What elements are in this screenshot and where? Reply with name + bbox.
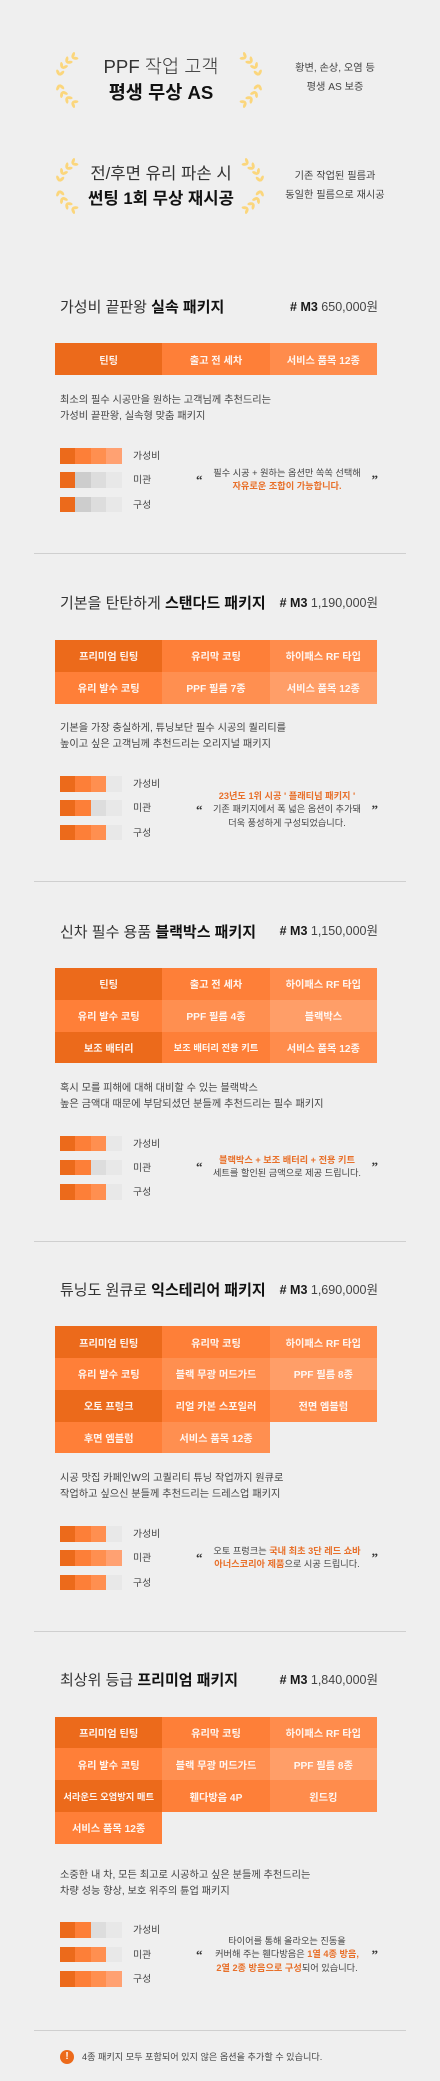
description: 가성비 끝판왕, 실속형 맞춤 패키지 [60, 411, 205, 422]
heading: 튜닝도 원큐로 익스테리어 패키지 [60, 1282, 266, 1299]
callout [196, 1545, 378, 1572]
callout: 2열 2종 방음으로 구성되어 있습니다. [216, 1963, 358, 1973]
panel: glass damage re-tinting [56, 158, 385, 214]
panel: value package [55, 299, 378, 512]
rating: looks: 미관 [133, 803, 151, 814]
rating: looks: 미관 [133, 1553, 151, 1564]
icon: exclamation: ! [65, 2051, 69, 2062]
service grid: 하이패스 RF 타입 [286, 652, 361, 663]
service grid [55, 968, 377, 1063]
rating: value [60, 448, 160, 464]
callout [196, 791, 378, 828]
heading: 가성비 끝판왕 실속 패키지 [60, 299, 224, 316]
service grid: 리얼 카본 스포일러 [176, 1402, 256, 1413]
callout: “ [196, 1947, 202, 1962]
service grid: 블랙박스 [305, 1012, 342, 1023]
callout: 더욱 풍성하게 구성되었습니다. [228, 818, 346, 828]
description: 높은 금액대 때문에 부담되셨던 분들께 추천드리는 필수 패키지 [60, 1099, 324, 1110]
callout: 타이어를 통해 올라오는 진동을 [228, 1936, 346, 1946]
service grid: 틴팅 [99, 980, 118, 991]
rating: value [60, 1922, 165, 1938]
service grid: 휀다방음 4P [190, 1793, 242, 1804]
service grid: 하이패스 RF 타입 [286, 980, 361, 991]
rating: composition: 구성 [133, 828, 151, 838]
rating: looks [60, 1160, 151, 1175]
rating: looks [60, 800, 151, 816]
service grid: 유리막 코팅 [191, 1729, 241, 1740]
heading: 최상위 등급 프리미엄 패키지 [60, 1672, 238, 1689]
service grid: 서비스 품목 12종 [72, 1824, 145, 1835]
description: 시공 맛집 카페인W의 고퀄리티 튜닝 작업까지 원큐로 [60, 1473, 283, 1484]
description [60, 1868, 310, 1899]
service grid: 유리 발수 코팅 [78, 1761, 140, 1772]
service grid: 프리미엄 틴팅 [79, 1339, 138, 1350]
panel: premium package [0, 1663, 440, 2030]
rating: looks: 미관 [133, 475, 151, 486]
rating: value: 가성비 [133, 779, 160, 790]
text: lifetime AS detail [295, 62, 375, 92]
description [60, 1471, 283, 1502]
rating: value: 가성비 [133, 451, 160, 462]
service grid: 오토 프렁크 [84, 1402, 134, 1413]
callout: 오토 프렁크는 국내 최초 3단 레드 쇼바 [213, 1546, 361, 1556]
service grid: 윈드킹 [309, 1793, 337, 1804]
service grid: 유리막 코팅 [191, 1339, 241, 1350]
service grid: 서비스 품목 12종 [179, 1434, 253, 1445]
service grid: 전면 엠블럼 [298, 1402, 348, 1413]
service grid: 유리 발수 코팅 [78, 684, 140, 695]
icon: exclamation [60, 2050, 74, 2064]
rating: composition [60, 1971, 165, 1987]
rating: composition [60, 825, 151, 840]
description: 기본을 가장 충실하게, 튜닝보단 필수 시공의 퀄리티를 [60, 723, 286, 734]
heading: re-tinting [88, 164, 234, 208]
rating: composition: 구성 [133, 1974, 151, 1985]
text: re-tinting detail: 기존 작업된 필름과 [295, 171, 375, 182]
text: lifetime AS detail: 평생 AS 보증 [307, 82, 363, 92]
service grid: 하이패스 RF 타입 [286, 1729, 361, 1740]
callout: “ [196, 472, 202, 487]
callout: 23년도 1위 시공 ' 플래티넘 패키지 ' [219, 791, 355, 801]
service grid: 하이패스 RF 타입 [286, 1339, 361, 1350]
rating: composition: 구성 [133, 500, 151, 511]
description [60, 394, 271, 422]
service grid: 틴팅 [99, 356, 118, 367]
service grid: 유리 발수 코팅 [78, 1012, 140, 1023]
callout: 블랙박스 + 보조 배터리 + 전용 키트 [219, 1155, 355, 1165]
service grid: 후면 엠블럼 [84, 1434, 134, 1445]
service grid: 출고 전 세차 [190, 980, 242, 991]
heading: lifetime AS: PPF 작업 고객 [104, 56, 218, 77]
callout: “ [196, 1159, 202, 1174]
service grid: 서비스 품목 12종 [287, 1044, 360, 1055]
icon: right laurel [242, 158, 264, 214]
footer note [60, 2049, 330, 2065]
rating: looks: 미관 [133, 1950, 151, 1961]
callout: 세트를 할인된 금액으로 제공 드립니다. [213, 1168, 361, 1178]
price: # M3 1,690,000원 [280, 1282, 378, 1296]
panel: black box package [55, 924, 378, 1200]
service grid: 보조 배터리 전용 키트 [174, 1043, 258, 1053]
service grid: 유리 발수 코팅 [78, 1370, 140, 1381]
callout [196, 1935, 378, 1975]
service grid: 출고 전 세차 [190, 356, 242, 367]
service grid [55, 343, 377, 375]
service grid: 블랙 무광 머드가드 [176, 1761, 256, 1772]
description: 혹시 모를 피해에 대해 대비할 수 있는 블랙박스 [60, 1083, 258, 1094]
heading: lifetime AS [104, 56, 218, 103]
rating: composition [60, 1184, 151, 1200]
text: lifetime AS detail: 황변, 손상, 오염 등 [295, 63, 375, 74]
rating: looks [60, 1550, 165, 1566]
callout: “ [196, 1550, 202, 1565]
text: re-tinting detail: 동일한 필름으로 재시공 [285, 190, 385, 200]
heading: re-tinting: 전/후면 유리 파손 시 [90, 164, 232, 183]
icon: right laurel [240, 52, 262, 108]
heading: 신차 필수 용품 블랙박스 패키지 [60, 924, 256, 941]
rating: looks [60, 1947, 165, 1963]
description: 작업하고 싶으신 분들께 추천드리는 드레스업 패키지 [60, 1489, 280, 1500]
callout: 커버해 주는 휀다방음은 1열 4종 방음, [215, 1949, 359, 1959]
service grid: 서비스 품목 12종 [287, 356, 360, 367]
rating: composition [60, 1575, 165, 1591]
callout: ” [372, 1550, 378, 1565]
panel: lifetime AS guarantee [56, 52, 375, 108]
service grid: 보조 배터리 [84, 1044, 134, 1055]
rating: value: 가성비 [133, 1139, 160, 1150]
note text: 4종 패키지 모두 포함되어 있지 않은 옵션을 추가할 수 있습니다. [82, 2052, 322, 2062]
callout: ” [372, 1159, 378, 1174]
icon: left laurel [56, 52, 78, 108]
service grid: 서비스 품목 12종 [287, 684, 360, 695]
price: # M3 1,840,000원 [280, 1673, 378, 1687]
rating: composition [60, 497, 151, 512]
panel: exterior package [55, 1282, 378, 1590]
callout: 필수 시공 + 원하는 옵션만 쏙쏙 선택해 [213, 468, 361, 478]
service grid [55, 1717, 377, 1844]
service grid: PPF 필름 7종 [186, 684, 246, 695]
rating: composition: 구성 [133, 1578, 151, 1589]
description: 최소의 필수 시공만을 원하는 고객님께 추천드리는 [60, 395, 271, 406]
price: # M3 1,150,000원 [280, 924, 378, 938]
rating: value [60, 1526, 165, 1542]
rating: looks: 미관 [133, 1163, 151, 1174]
callout: 자유로운 조합이 가능합니다. [232, 481, 342, 491]
description: 높이고 싶은 고객님께 추천드리는 오리지널 패키지 [60, 739, 271, 750]
service grid: PPF 필름 4종 [186, 1012, 246, 1023]
heading: 기본을 탄탄하게 스탠다드 패키지 [60, 595, 266, 612]
callout: 아너스코리아 제품으로 시공 드립니다. [214, 1559, 360, 1569]
service grid: 블랙 무광 머드가드 [176, 1370, 256, 1381]
description: 차량 성능 향상, 보호 위주의 튠업 패키지 [60, 1886, 230, 1897]
service grid: PPF 필름 8종 [294, 1761, 353, 1772]
icon: left laurel [56, 158, 78, 214]
service grid: 프리미엄 틴팅 [79, 652, 138, 663]
service grid: PPF 필름 8종 [294, 1370, 353, 1381]
panel: standard package [55, 595, 378, 840]
rating: composition: 구성 [133, 1187, 151, 1198]
rating: looks [60, 472, 151, 488]
service grid [55, 640, 377, 704]
price: # M3 1,190,000원 [280, 596, 378, 610]
callout [196, 1155, 378, 1178]
callout: ” [372, 472, 378, 487]
price: # M3 650,000원 [290, 300, 378, 314]
service grid: 서라운드 오염방지 매트 [63, 1792, 154, 1802]
callout: ” [372, 802, 378, 817]
text: re-tinting detail [285, 170, 385, 200]
service grid [55, 1326, 377, 1453]
callout: 기존 패키지에서 폭 넓은 옵션이 추가돼 [213, 804, 361, 814]
description [60, 722, 286, 750]
heading: re-tinting: 썬팅 1회 무상 재시공 [88, 189, 234, 208]
rating: value: 가성비 [133, 1529, 160, 1540]
service grid: 유리막 코팅 [191, 652, 241, 663]
rating: value: 가성비 [133, 1925, 160, 1936]
rating: value [60, 776, 160, 792]
description [60, 1082, 324, 1110]
callout: ” [372, 1947, 378, 1962]
callout: “ [196, 802, 202, 817]
callout [196, 468, 378, 491]
description: 소중한 내 차, 모든 최고로 시공하고 싶은 분들께 추천드리는 [60, 1870, 310, 1881]
heading: lifetime AS: 평생 무상 AS [109, 82, 213, 103]
rating: value [60, 1136, 160, 1151]
service grid: 프리미엄 틴팅 [79, 1729, 138, 1740]
